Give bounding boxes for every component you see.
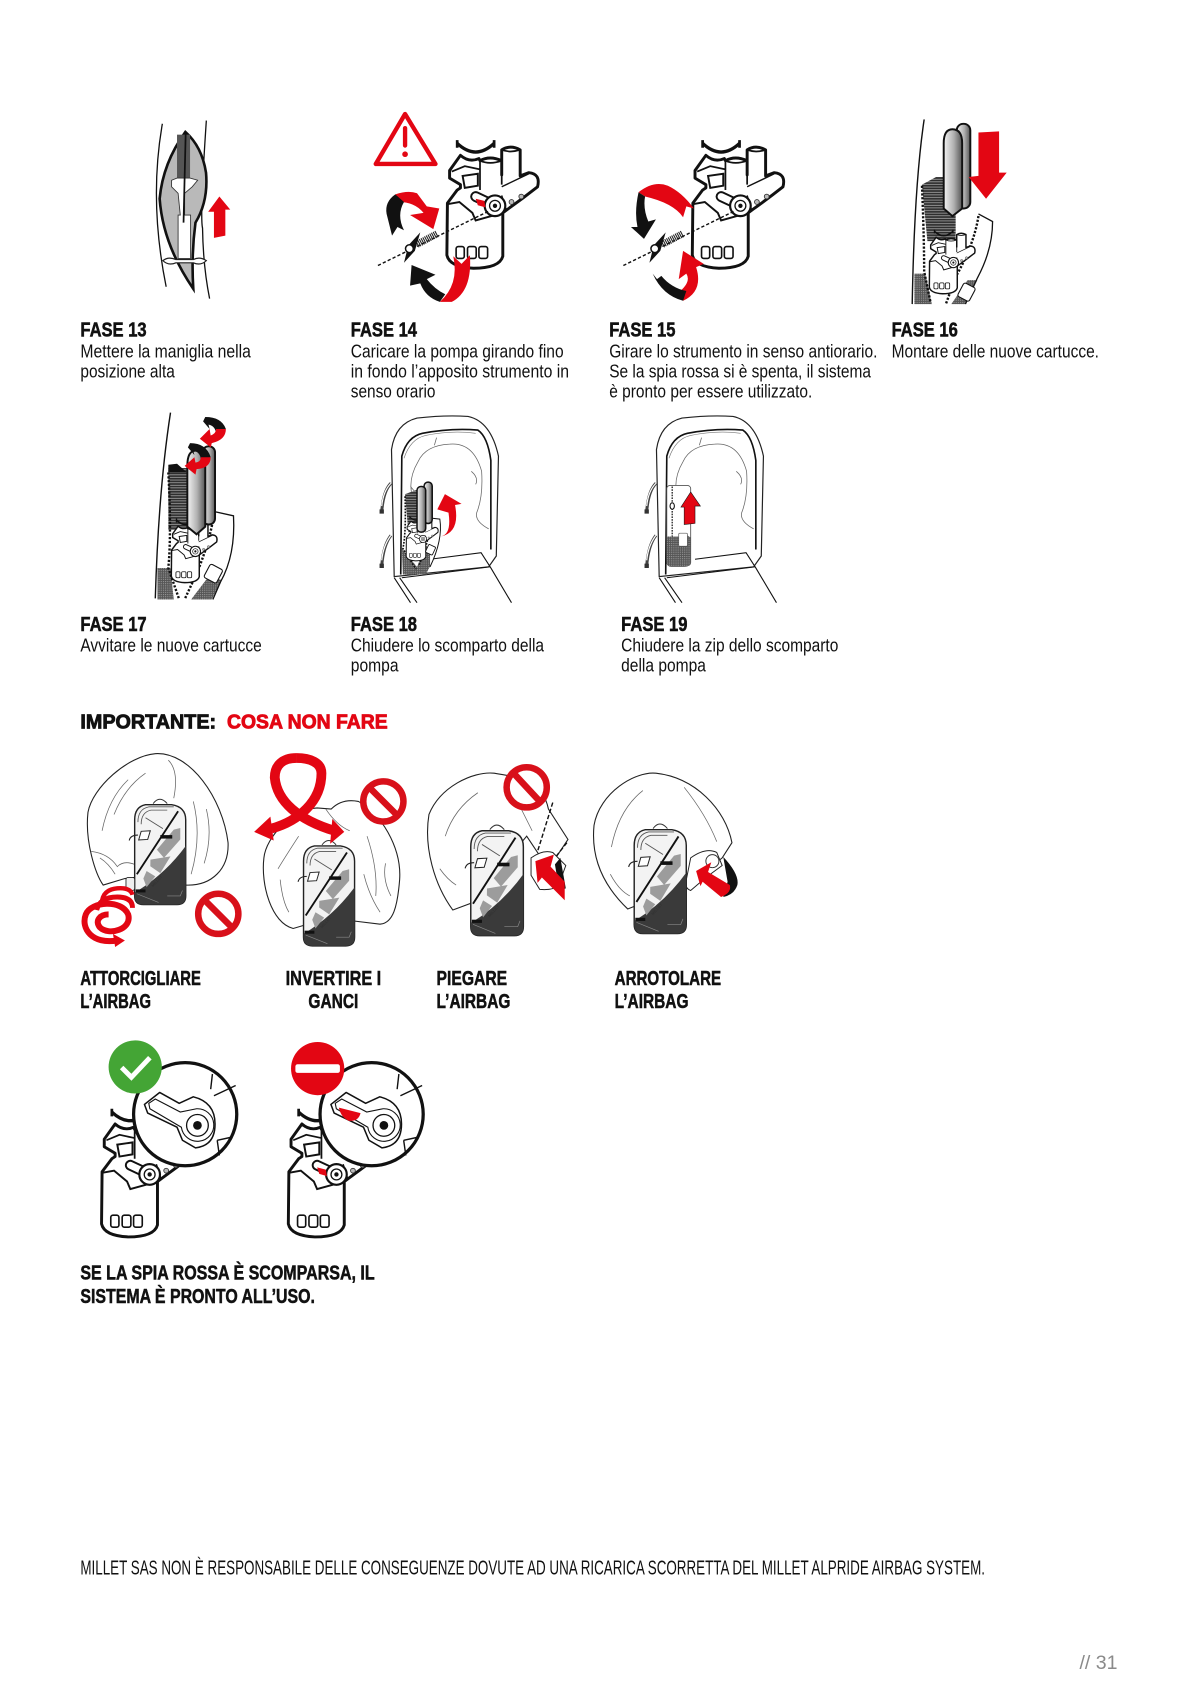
page number: // 31 xyxy=(1079,1652,1117,1674)
panel: fase 17 xyxy=(80,413,262,656)
text block xyxy=(621,635,838,676)
panel: fase 16 xyxy=(892,119,1099,361)
heading: FASE 17 xyxy=(80,613,147,636)
arrow: red xyxy=(696,862,730,897)
text block: ready note xyxy=(80,1261,375,1308)
illustration: magnifier with red indicator xyxy=(320,1063,423,1166)
heading: FASE 19 xyxy=(621,613,687,636)
heading: importante xyxy=(80,711,388,734)
panel: invertire i ganci xyxy=(254,758,403,1013)
panel: pump OK indicator xyxy=(102,1040,237,1237)
text block: della pompa xyxy=(621,655,706,676)
text block: senso orario xyxy=(351,380,435,401)
illustration: pump xyxy=(288,1109,380,1237)
arrow: curved up xyxy=(437,494,462,536)
label xyxy=(80,967,201,1013)
text block: Se la spia rossa si è spenta, il sistema xyxy=(609,360,872,381)
illustration: magnifier xyxy=(134,1063,237,1166)
illustration: twisted airbag xyxy=(85,754,238,947)
icon: green check xyxy=(109,1040,162,1094)
label xyxy=(437,967,510,1013)
text block: ready note: SISTEMA È PRONTO ALL’USO. xyxy=(80,1285,315,1308)
arrow: lower twist xyxy=(188,443,211,459)
arrow: up xyxy=(681,492,700,525)
panel: fase 14 xyxy=(351,114,569,401)
icon: prohibition sign xyxy=(363,781,403,822)
text block: in fondo l’apposito strumento in xyxy=(351,360,569,381)
illustration: pump xyxy=(102,1109,193,1237)
heading: importante: COSA NON FARE xyxy=(227,711,388,734)
label: PIEGARE xyxy=(437,967,507,990)
text block: Mettere la maniglia nella xyxy=(80,340,251,361)
text block: Avvitare le nuove cartucce xyxy=(80,635,262,656)
arrow: counterclockwise top xyxy=(631,184,694,239)
panel: piegare xyxy=(428,767,568,1013)
arrow: clockwise bottom xyxy=(410,255,470,302)
heading: FASE 13 xyxy=(80,319,147,342)
arrow: red loop xyxy=(271,758,321,829)
panel: arrotolare xyxy=(594,773,738,1013)
heading: FASE 14 xyxy=(351,319,417,342)
panel: attorcigliare xyxy=(80,754,238,1013)
text block: posizione alta xyxy=(80,360,175,381)
panel: fase 18 xyxy=(351,416,545,676)
illustration: close zip xyxy=(645,416,776,603)
text block xyxy=(609,340,877,401)
label: ARROTOLARE xyxy=(615,967,721,990)
illustration: close pump compartment xyxy=(380,416,511,603)
label: L’AIRBAG xyxy=(80,990,151,1013)
label: L’AIRBAG xyxy=(615,990,689,1013)
icon: prohibition sign xyxy=(198,894,238,934)
illustration: rolled airbag xyxy=(594,773,738,934)
icon: warning triangle xyxy=(376,114,435,164)
illustration: screw in cartridges xyxy=(155,413,234,599)
icon: red spiral arrow xyxy=(85,888,132,941)
text block: Montare delle nuove cartucce. xyxy=(892,340,1099,361)
icon: prohibition sign xyxy=(507,767,547,807)
panel: pump not ready indicator xyxy=(288,1042,423,1237)
text block: ready note: SE LA SPIA ROSSA È SCOMPARSA, IL xyxy=(80,1261,375,1284)
text block: Chiudere lo scomparto della xyxy=(351,635,545,656)
arrow: clockwise top xyxy=(386,192,439,236)
illustration: pump with tool xyxy=(378,140,538,268)
label: INVERTIRE I xyxy=(286,967,381,990)
text block: Chiudere la zip dello scomparto xyxy=(621,635,838,656)
illustration: new cartridges xyxy=(912,119,1007,304)
illustration: handle raised inside pocket xyxy=(156,121,230,299)
heading: FASE 16 xyxy=(892,319,958,342)
text block xyxy=(351,635,545,676)
arrow: up xyxy=(208,197,230,238)
illustration: inverted hooks xyxy=(254,758,403,946)
label xyxy=(286,967,381,1013)
text block: è pronto per essere utilizzato. xyxy=(609,380,812,401)
icon: red no entry xyxy=(291,1042,344,1095)
panel: fase 13 xyxy=(80,121,251,381)
arrow: down xyxy=(969,131,1007,199)
text block xyxy=(351,340,569,401)
text block: Caricare la pompa girando fino xyxy=(351,340,564,361)
label xyxy=(615,967,721,1013)
heading: importante: IMPORTANTE: xyxy=(80,711,216,734)
text block: Girare lo strumento in senso antiorario. xyxy=(609,340,877,361)
illustration: pump with tool xyxy=(623,140,784,268)
arrow: counterclockwise bottom xyxy=(653,251,704,301)
panel: fase 15 xyxy=(609,140,877,401)
text block xyxy=(80,340,251,381)
panel: fase 19 xyxy=(621,416,838,676)
arrow: upper twist xyxy=(203,417,226,433)
heading: FASE 15 xyxy=(609,319,675,342)
label: GANCI xyxy=(308,990,358,1013)
arrow: red xyxy=(535,855,565,900)
heading: FASE 18 xyxy=(351,613,417,636)
illustration: folded airbag xyxy=(428,767,568,936)
label: L’AIRBAG xyxy=(437,990,510,1013)
text block: pompa xyxy=(351,655,399,676)
label: ATTORCIGLIARE xyxy=(80,967,201,990)
